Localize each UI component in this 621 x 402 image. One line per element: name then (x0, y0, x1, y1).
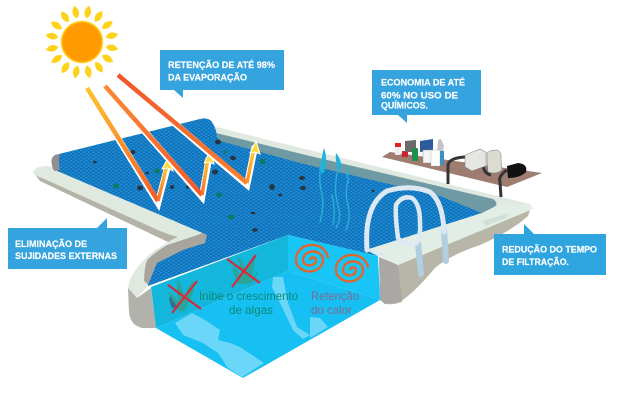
ladder (367, 188, 446, 274)
water section: floor (156, 271, 380, 378)
callout: filtration time: DE FILTRAÇÃO. (502, 257, 569, 267)
algae with red cross 1 (168, 279, 201, 313)
callout: evaporation (160, 50, 284, 98)
chemicals and pump on bench (382, 139, 542, 197)
left coping (33, 166, 207, 242)
chemical containers (395, 139, 444, 166)
back coping (214, 127, 533, 209)
callout: external dirt: SUJIDADES EXTERNAS (15, 251, 117, 261)
water section: right wall (288, 235, 380, 300)
cover roll end (51, 154, 60, 171)
steam waves (320, 148, 350, 230)
label: algae growth (199, 289, 298, 317)
label: heat retention: do calor (311, 303, 352, 317)
label: algae growth: de algas (229, 303, 273, 317)
label: heat retention (311, 289, 359, 317)
callout: chemicals (372, 70, 481, 123)
curved corner coping (128, 233, 207, 328)
callout: chemicals: 60% NO USO DE (381, 90, 458, 100)
callout: evaporation: RETENÇÃO DE ATÉ 98% (168, 59, 275, 70)
debris on cover (93, 140, 374, 232)
water section: left wall (151, 235, 288, 328)
bench (382, 152, 542, 187)
sun (45, 5, 119, 79)
heat spirals (296, 245, 368, 282)
label: algae growth: Inibe o crescimento (199, 289, 298, 303)
ray 2 (105, 86, 214, 197)
floor caustics (175, 277, 328, 377)
algae with red cross 2 (227, 255, 260, 287)
pool structure (33, 118, 533, 378)
filter box (465, 149, 486, 171)
callout: external dirt: ELIMINAÇÃO DE (15, 239, 87, 249)
front coping (366, 204, 533, 304)
callout: external dirt (8, 218, 127, 269)
callout: chemicals: QUÍMICOS. (381, 100, 428, 110)
sun rays reflecting off cover (87, 75, 260, 203)
callout: evaporation: DA EVAPORAÇÃO (168, 72, 247, 82)
ray 1 (87, 88, 173, 203)
hoses (448, 157, 507, 197)
back wall strip (216, 133, 496, 214)
label: heat retention: Retenção (311, 289, 359, 303)
pump motor (507, 163, 526, 178)
callout: filtration time (494, 224, 606, 275)
pool cover (53, 118, 482, 286)
callout: filtration time: REDUÇÃO DO TEMPO (502, 244, 597, 254)
callout: chemicals: ECONOMIA DE ATÉ (381, 76, 465, 88)
filter tank (487, 150, 502, 173)
ray 3 (118, 75, 260, 185)
